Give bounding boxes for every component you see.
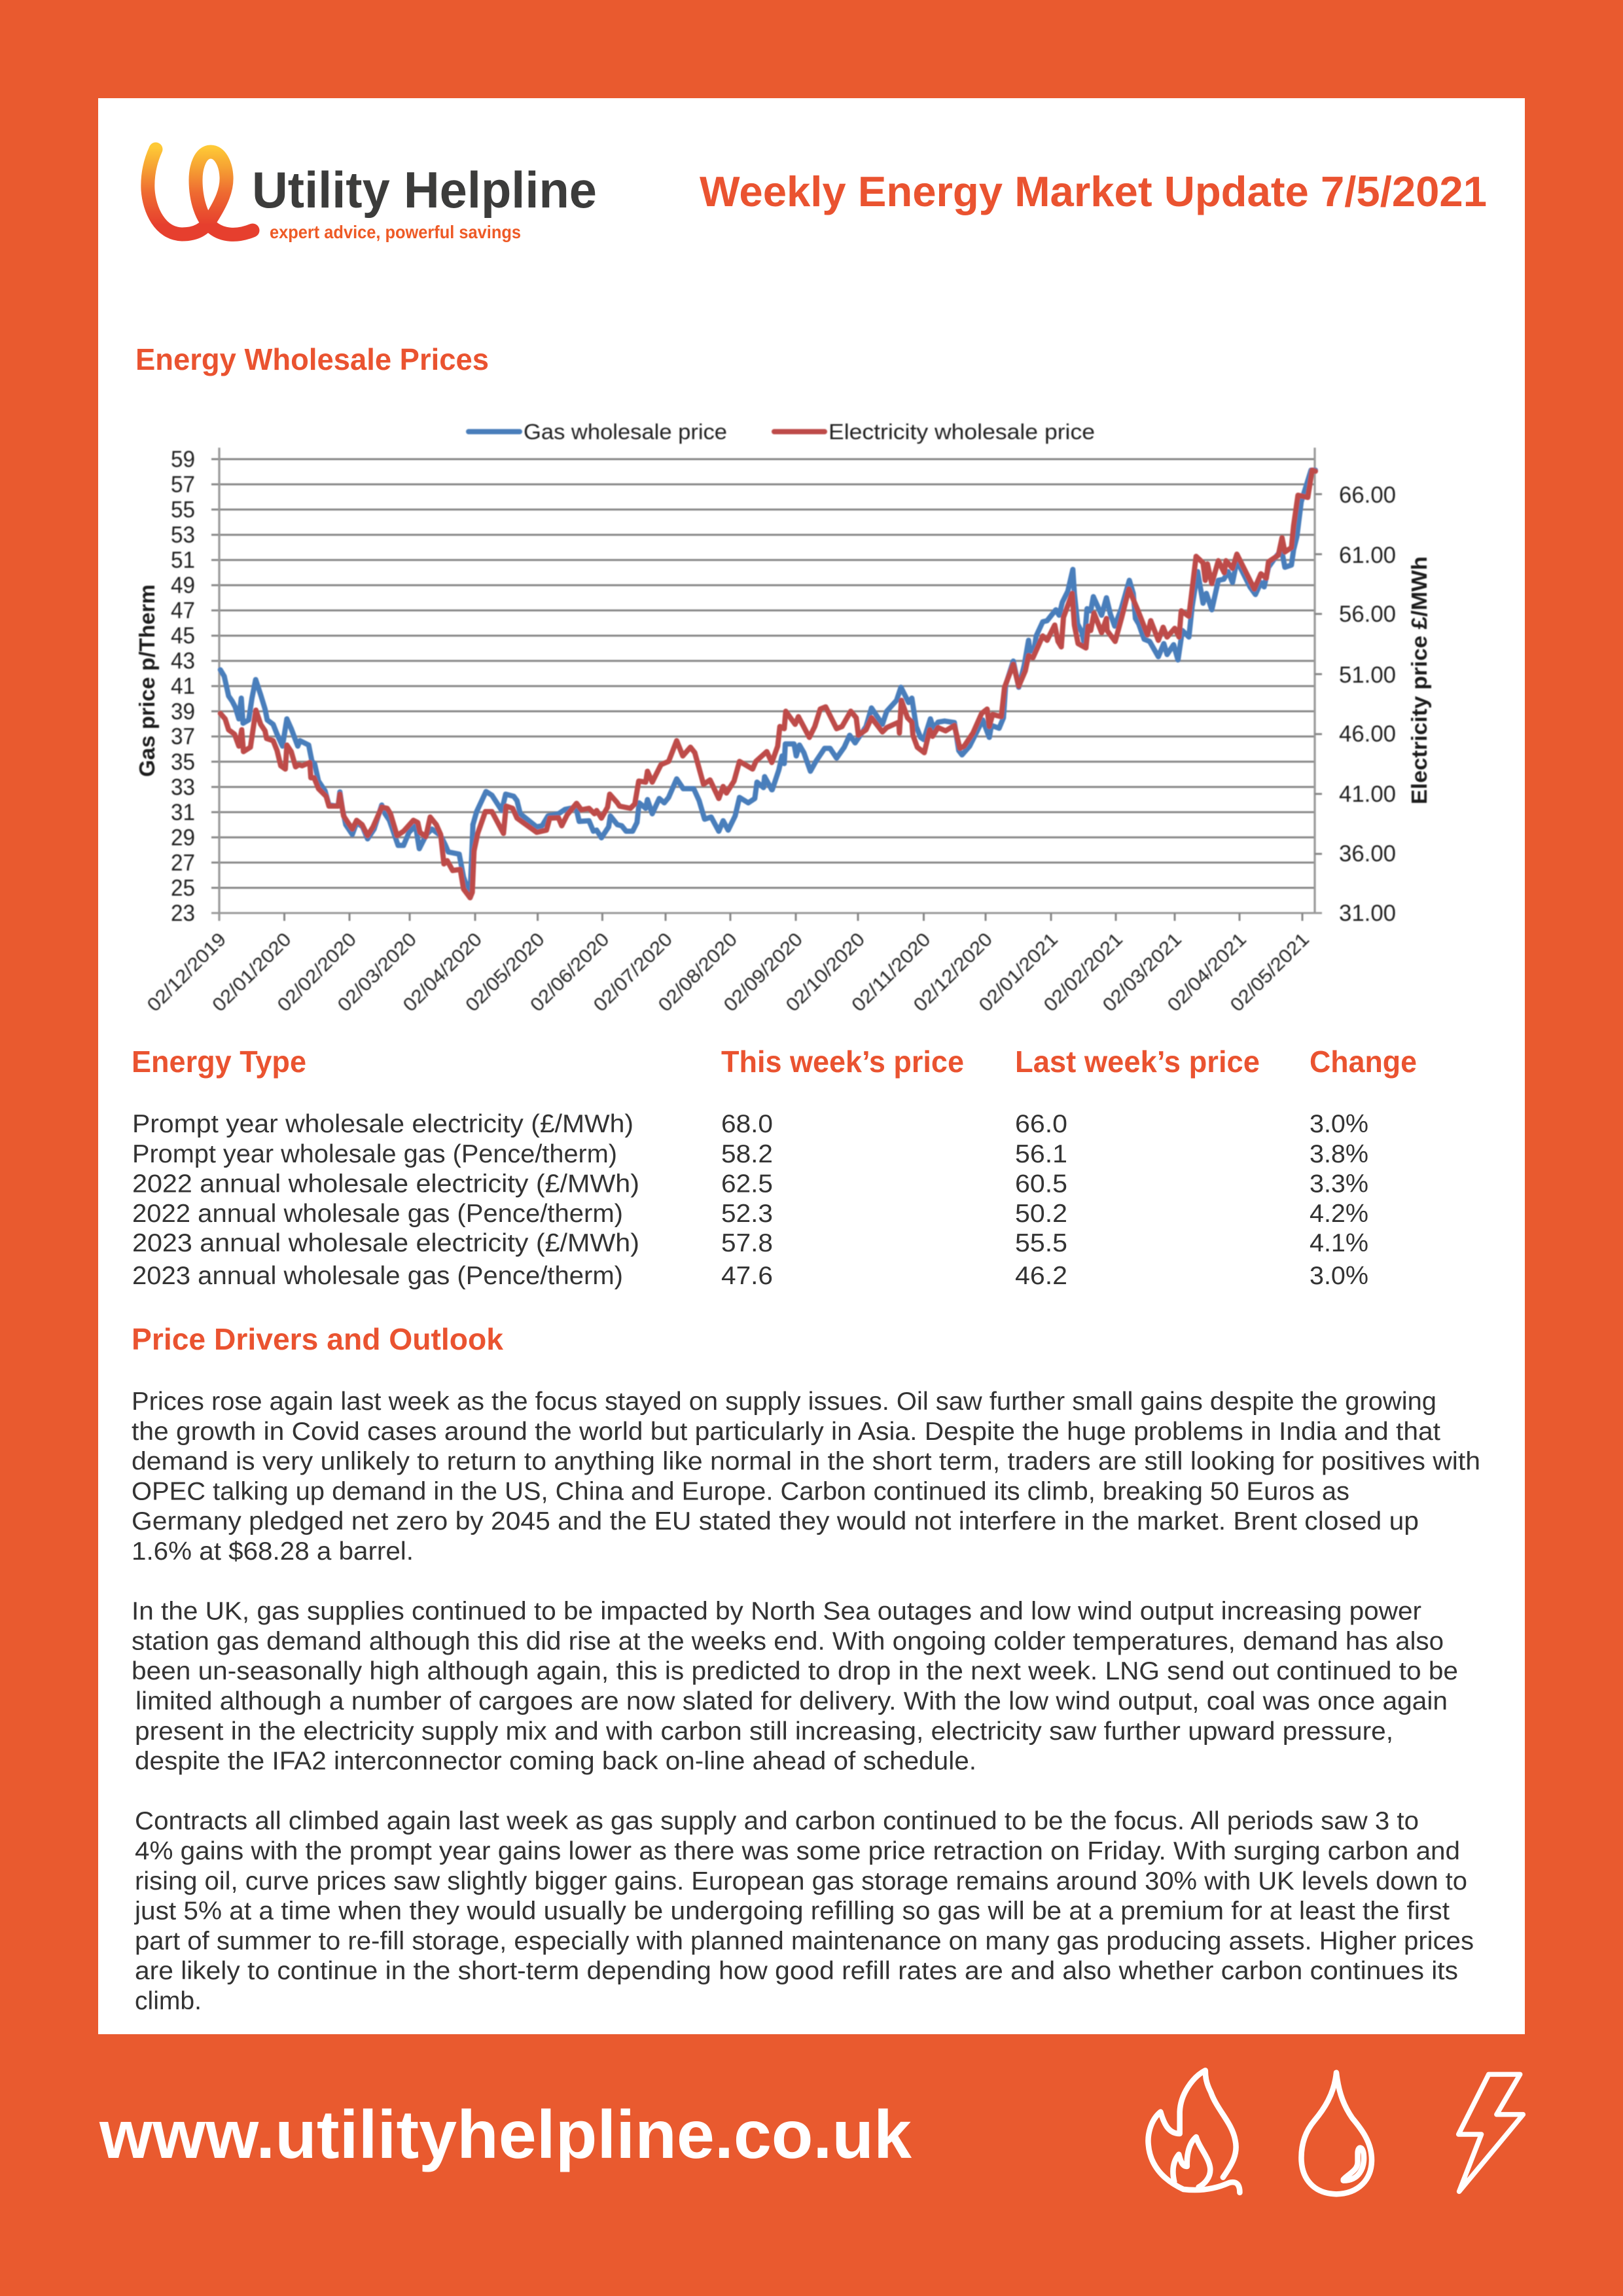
x axis date labels: 02/06/2020 [526,929,613,1016]
logo wordmark: Utility Helpline [252,161,597,219]
row: 2022 gas: 2022 annual wholesale gas (Pence/therm) [132,1200,623,1228]
row: 2022 gas: 4.2% [1310,1200,1368,1228]
price table [132,1045,1417,1290]
left axis labels: 55 [171,497,195,522]
legend: Gas wholesale price [524,420,727,444]
x axis date labels: 02/02/2020 [274,929,361,1016]
row: prompt year gas: 56.1 [1015,1140,1067,1168]
paragraph 3 [134,1807,1474,2015]
x axis date labels: 02/08/2020 [654,929,741,1016]
paragraph 3: just 5% at a time when they would usually be undergoing refilling so gas will be at a premium for at least the first [134,1897,1450,1926]
legend: Electricity wholesale price [829,420,1095,444]
right axis labels: 31.00 [1339,901,1396,926]
paragraph 3: part of summer to re-fill storage, especially with planned maintenance on many gas producing assets. Higher prices [135,1927,1474,1955]
paragraph 1 [132,1388,1480,1566]
row: 2022 electricity: 2022 annual wholesale electricity (£/MWh) [132,1170,639,1198]
row: prompt year gas [132,1140,1368,1168]
row: 2023 gas [132,1262,1368,1290]
row: 2022 gas: 52.3 [721,1200,773,1228]
paragraph 1: the growth in Covid cases around the world but particularly in Asia. Despite the huge problems in India and that [132,1418,1440,1446]
row: 2022 electricity [132,1170,1368,1198]
paragraph 3: Contracts all climbed again last week as gas supply and carbon continued to be the focus. All periods saw 3 to [135,1807,1419,1835]
table header: This week’s price [721,1045,964,1079]
icon: flame [1148,2070,1240,2193]
left axis labels: 57 [171,472,195,497]
paragraph 1: demand is very unlikely to return to anything like normal in the short term, traders are still looking for positives with [132,1448,1480,1476]
electricity price line [221,470,1315,898]
left axis labels: 35 [171,749,195,775]
logo tagline: expert advice, powerful savings [270,222,521,242]
x axis date labels: 02/12/2020 [910,929,997,1016]
paragraph 2: station gas demand although this did rise at the weeks end. With ongoing colder temperatures, demand has also [132,1627,1444,1655]
left axis title: Gas price p/Therm [135,584,159,777]
paragraph 2: been un-seasonally high although again, this is predicted to drop in the next week. LNG send out continued to be [132,1657,1458,1685]
left axis labels: 37 [171,724,195,749]
paragraph 1: OPEC talking up demand in the US, China and Europe. Carbon continued its climb, breaking 50 Euros as [132,1477,1349,1505]
logo: Utility Helpline [148,149,597,242]
x axis date labels: 02/07/2020 [590,929,677,1016]
paragraph 2 [132,1598,1458,1776]
legend [469,420,1095,444]
paragraph 2: In the UK, gas supplies continued to be impacted by North Sea outages and low wind output increasing power [132,1598,1421,1626]
icon: water drop [1301,2073,1372,2194]
paragraph 3: rising oil, curve prices saw slightly bigger gains. European gas storage remains around 30% with UK levels down to [135,1867,1467,1895]
paragraph 2: despite the IFA2 interconnector coming back on-line ahead of schedule. [135,1748,976,1776]
x axis date labels: 02/11/2020 [848,929,935,1016]
right axis labels [1339,482,1396,926]
row: 2023 gas: 47.6 [721,1262,773,1290]
left axis labels: 41 [171,673,195,699]
row: prompt year electricity: 66.0 [1015,1110,1067,1138]
left axis labels: 43 [171,649,195,674]
row: 2023 electricity [132,1229,1368,1257]
right axis labels: 36.00 [1339,841,1396,867]
x axis date labels: 02/05/2020 [462,929,549,1016]
row: prompt year electricity: 68.0 [721,1110,773,1138]
left axis labels: 53 [171,522,195,548]
table header: Last week’s price [1015,1045,1260,1079]
left axis labels: 45 [171,623,195,649]
x axis date labels: 02/12/2019 [143,929,230,1016]
paragraph 3: 4% gains with the prompt year gains lower as there was some price retraction on Friday. With surging carbon and [135,1837,1460,1865]
row: prompt year electricity: 3.0% [1310,1110,1368,1138]
title: Weekly Energy Market Update 7/5/2021 [700,168,1487,215]
x axis date labels: 02/04/2021 [1164,929,1251,1016]
x axis date labels: 02/01/2021 [975,929,1062,1016]
left axis labels: 25 [171,876,195,901]
right axis labels: 56.00 [1339,601,1396,627]
gas price line [221,470,1315,895]
row: 2023 gas: 46.2 [1015,1262,1067,1290]
row: prompt year gas: 58.2 [721,1140,773,1168]
right axis labels: 66.00 [1339,482,1396,508]
row: 2022 electricity: 60.5 [1015,1170,1067,1198]
left axis labels: 59 [171,446,195,473]
left axis labels: 51 [171,548,195,573]
chart: gas and electricity wholesale prices [135,420,1431,1016]
paragraph 1: 1.6% at $68.28 a barrel. [132,1537,414,1566]
row: 2023 gas: 3.0% [1310,1262,1368,1290]
row: 2022 gas: 50.2 [1015,1200,1067,1228]
left axis labels: 27 [171,850,195,876]
heading: Price Drivers and Outlook: Price Drivers and Outlook [132,1322,503,1356]
row: prompt year electricity [132,1110,1368,1138]
row: 2023 electricity: 2023 annual wholesale electricity (£/MWh) [132,1229,639,1257]
row: 2023 electricity: 4.1% [1310,1229,1368,1257]
left axis labels [171,446,195,926]
right axis labels: 41.00 [1339,781,1396,807]
paragraph 1: Prices rose again last week as the focus stayed on supply issues. Oil saw further small gains despite the growing [132,1388,1436,1416]
right axis labels: 46.00 [1339,721,1396,747]
icon: lightning bolt [1459,2074,1523,2191]
row: prompt year electricity: Prompt year wholesale electricity (£/MWh) [132,1110,633,1138]
row: 2022 electricity: 3.3% [1310,1170,1368,1198]
left axis labels: 49 [171,573,195,598]
right axis labels: 61.00 [1339,543,1396,568]
table header: Energy Type [132,1045,306,1079]
white content panel [98,98,1525,2034]
right axis title: Electricity price £/MWh [1407,556,1431,804]
row: 2023 gas: 2023 annual wholesale gas (Pence/therm) [132,1262,623,1290]
row: 2022 gas [132,1200,1368,1228]
paragraph 3: are likely to continue in the short-term depending how good refill rates are and also whether carbon continues its [135,1957,1458,1985]
left axis labels: 23 [171,901,195,926]
row: 2023 electricity: 55.5 [1015,1229,1067,1257]
left axis labels: 47 [171,598,195,624]
left axis labels: 29 [171,825,195,850]
row: 2022 electricity: 62.5 [721,1170,773,1198]
x axis date labels: 02/10/2020 [782,929,869,1016]
x axis date labels: 02/03/2021 [1099,929,1186,1016]
x axis date labels: 02/04/2020 [399,929,486,1016]
row: 2023 electricity: 57.8 [721,1229,773,1257]
x axis date labels: 02/09/2020 [720,929,807,1016]
x axis date labels: 02/01/2020 [209,929,295,1016]
paragraph 3: climb. [135,1987,202,2015]
x axis date labels [143,929,1313,1016]
left axis labels: 31 [171,800,195,825]
table header [132,1045,1417,1079]
x axis date labels: 02/02/2021 [1040,929,1127,1016]
footer url: www.utilityhelpline.co.uk [99,2097,912,2173]
paragraph 2: present in the electricity supply mix and with carbon still increasing, electricity saw further upward pressure, [135,1717,1393,1746]
x axis date labels: 02/05/2021 [1226,929,1313,1016]
heading: Energy Wholesale Prices: Energy Wholesale Prices [135,342,489,376]
row: prompt year gas: 3.8% [1310,1140,1368,1168]
x axis date labels: 02/03/2020 [334,929,421,1016]
table header: Change [1310,1045,1417,1079]
right axis labels: 51.00 [1339,662,1396,688]
left axis labels: 39 [171,699,195,725]
paragraph 1: Germany pledged net zero by 2045 and the EU stated they would not interfere in the market. Brent closed up [132,1507,1419,1535]
paragraph 2: limited although a number of cargoes are now slated for delivery. With the low wind output, coal was once again [135,1687,1448,1715]
left axis labels: 33 [171,774,195,800]
row: prompt year gas: Prompt year wholesale gas (Pence/therm) [132,1140,617,1168]
logo swoosh icon [148,149,253,234]
